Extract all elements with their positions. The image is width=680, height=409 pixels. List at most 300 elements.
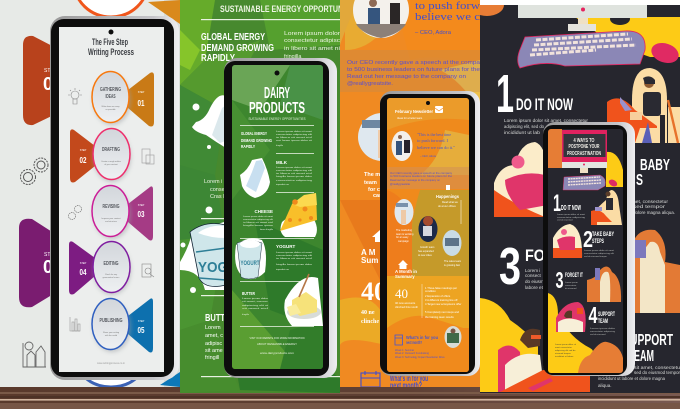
circle 1 gathering ideas: as possible [105,109,116,111]
step 1 label: 01 [138,98,145,108]
big yogurt cup: YOG [198,259,228,276]
left lorem: Cras l [210,194,224,200]
lorem yogurt: fringilla lorem ipsum dolor [276,263,312,266]
keyboard small [563,175,605,190]
lorem body top [284,31,340,60]
heading global: DEMAND GROWING [241,138,272,143]
month summary [395,269,417,279]
circle 3 revising: and structure [105,220,118,223]
big 40: 40 [361,277,387,306]
subtitle: SUSTAINABLE ENERGY OPPORTUNITIES [248,117,306,121]
circle 2 drafting [93,128,130,180]
speech paragraph: @reallygreatsite [390,182,411,186]
icon: calendar small [395,335,402,345]
heading global: GLOBAL ENERGY [241,131,267,136]
big yogurt cup [190,224,228,286]
forget text: consect [525,273,542,278]
what's in for you: next month? [390,381,422,390]
circle 1 gathering ideas: GATHERING [100,87,121,93]
number 2: 2 [583,226,593,252]
cheese splash [280,219,317,237]
heading take baby steps [636,157,670,189]
paragraph [347,60,480,87]
big number 1: 1 [496,64,514,124]
monitor [518,5,647,31]
dark notch [610,13,630,25]
speech paragraph [390,171,453,186]
left white text: can [373,193,383,199]
white captions: The sales team [444,260,461,263]
what's next [406,335,438,345]
text 1: Lorem ipsum dolor sit amet [557,213,585,216]
what's in for you: What's in for you [390,374,428,383]
heading global [241,132,272,148]
month summary: Summary [395,274,415,279]
big orange bow [148,0,180,24]
week list: Week 1: Seminar [395,349,414,352]
left white text: team [364,180,377,186]
icon: big chart [23,342,46,367]
40 caption: 40 new accounts [395,301,416,305]
do it now text: incididunt ut lab [504,130,540,135]
quote: – CEO, Adora [420,154,437,158]
text 1: consectetur adipiscing [557,216,586,219]
circle 1 gathering ideas: IDEAS [106,94,116,100]
lorem global: fringilla [276,144,284,147]
lorem yogurt: imperdiet nec [276,268,290,271]
keyboard [518,31,645,68]
footer text [250,336,305,355]
heading yogurt: YOGURT [276,244,296,249]
circle 5 publishing: Share your writing [103,331,119,334]
speech paragraph: Our CEO recently gave a speech at the company [390,171,453,175]
lorem butter: sit amet, consec [242,300,269,303]
icon: lightbulb [68,88,82,104]
butter [287,274,321,319]
white captions: team is working [396,233,414,236]
white captions: campaign [398,240,409,243]
text 2: Lorem ipsum dolor sit amet [584,249,614,252]
orange blob top left [470,0,504,16]
40 small: 40 [395,286,408,301]
white captions: is growing fast [444,264,460,267]
lorem yogurt [276,251,313,271]
title dairy products [250,87,305,113]
support text: incididunt ut labore et dolore magna [598,376,665,381]
forget text: do eiusm [525,279,544,284]
yellow blob text: Lorem ipsum dolor sit [555,343,576,346]
monitor title: 4 WAYS TO [574,138,595,144]
number 3 small: 3 [556,267,564,293]
paragraph: Our CEO recently gave a speech at the compa [347,60,480,66]
icon: big gears [20,158,48,184]
lorem milk: in libero sit amet nisl [276,172,313,175]
illustration: person at laptop [607,68,680,143]
circle 3 revising [92,186,129,236]
quote text: – CEO, Adora [415,30,451,36]
step 3 label: STEP [138,204,145,207]
heading take baby steps small: STEPS [592,238,604,245]
photo office [394,199,414,225]
month summary: A Month in [395,269,417,274]
text 1 [557,213,586,222]
yogurt cup [237,240,262,279]
phone 2 [224,58,337,378]
heading support team [630,332,673,365]
title dairy products: PRODUCTS [249,100,305,117]
left lorem: conse [210,187,225,193]
lorem bottom: fringill [205,355,219,361]
newsletter title: February Newsletter [395,109,433,114]
phone 1 [50,16,179,380]
circle 4 editing: EDITING [104,261,119,267]
do it now text: adipiscing elit, sed do [504,124,544,129]
step 1 label: STEP [138,91,145,94]
circle 2 drafting: DRAFTING [102,147,120,153]
big step label 04 [44,252,50,273]
lorem yogurt: in libero sit amet nisl [276,257,313,260]
lorem body top: in libero sit amet ni [284,46,340,52]
lorem milk: fringilla lorem ipsum dolor [276,175,312,178]
step 4 label: STEP [80,262,87,265]
heading butter small: BUTTER [242,291,256,296]
big blue bow [160,372,180,387]
website footer: www.writingprocess.co.in [97,362,126,365]
white captions: Growth team [420,246,434,249]
big bow step 02 [23,36,50,126]
icon: small bar chart [70,317,80,331]
lorem global: orci lorem ipsum dolor sit [276,139,313,142]
milk splash [240,158,270,198]
illustration 3 [587,266,621,302]
quote text [415,0,480,36]
circle 2 drafting: Create a rough outline [101,160,122,163]
phone 4 [543,122,635,376]
text 4: consectetur adipiscing [590,330,616,333]
text 3: consectetur [565,284,577,287]
white captions: has expanded [418,250,434,253]
step 2 label: STEP [80,149,87,152]
text 4: Lorem ipsum dolor [590,327,615,330]
circle 1 gathering ideas [92,72,129,122]
step 2 bow [70,129,95,182]
left white text: for c [368,187,380,193]
dividers [240,125,314,327]
lorem global: in libero sit amet nisl [276,136,313,139]
support text: aliqua. [598,383,612,388]
timeline [460,200,462,224]
big yogurt splash [180,222,224,290]
a month summary [361,248,378,265]
background polygons [180,0,340,393]
support text [598,365,680,388]
icon: house [372,230,385,242]
yogurt splash [235,238,266,279]
icon: house small [398,260,408,269]
phone 3 [380,91,480,376]
lorem bottom: adipisc [205,341,222,347]
big bow step 04 [19,218,50,308]
photo meeting [392,131,412,161]
left lorem [204,179,224,198]
yellow blob top right [575,17,680,57]
yellow blob text [555,343,576,358]
lorem yogurt: Lorem ipsum dolor sit amet [276,251,313,254]
big orange circle behind phone [78,0,144,16]
text 2: consectetur adipiscing elit [584,252,614,255]
circle 4 editing: grammatical errors [103,276,119,279]
forget text [525,268,544,290]
title dairy products: DAIRY [264,85,290,102]
yellow swoops [340,0,480,345]
circle 2 drafting: of your content [104,163,118,166]
illustration: yellow blob and woman [480,298,590,392]
big milk bottle [212,106,224,143]
quote [417,132,455,158]
milk bottle [246,160,265,192]
list [422,284,461,319]
lorem milk: imperdiet nec [276,183,290,186]
footer text: ABOUT RENEWABLE ENERGY [257,342,297,346]
step 5 bow [128,298,153,352]
lorem global: consectetur adipiscing elit [276,133,313,136]
darker band [340,50,480,92]
big step label 04: 0 [43,257,53,277]
40 caption [395,301,419,309]
photo group [444,326,462,348]
icon: magnifier on page [142,264,154,277]
list: 5 Completely next steps and [425,310,459,314]
big step label 02 [44,68,50,90]
a month summary: A M [361,248,376,257]
40 subtitle: clinche [361,319,379,325]
lorem butter: Lorem ipsum dolor [242,297,268,300]
paragraph: @reallygreatsite. [347,81,393,87]
step 5 label [138,320,145,335]
step 4 label: 04 [80,267,87,277]
step 5 label: 05 [138,325,145,335]
wooden table [0,387,680,409]
step 2 label: 02 [80,155,87,165]
step 1 label [138,91,145,108]
heading take baby steps small: TAKE BABY [592,231,614,238]
lorem bottom: Lorem [205,325,221,331]
panel: dairy products [180,0,345,393]
baby steps text: het, consectetur [633,199,669,204]
heading global energy: DEMAND GROWING [201,43,274,54]
text 4 [590,327,616,336]
lorem cheese: lorem fringilla [260,228,274,231]
yellow blob text: adipiscing elit sed do [555,349,576,352]
quote: to push forward. I [417,138,448,143]
what's next: What's in for you [406,335,438,340]
circle 3 revising: Improve your content [102,217,121,220]
step 4 bow [69,241,95,294]
paragraph: to 500 business leaders on future plans for the [347,67,480,73]
heading take baby steps: S [636,172,643,189]
number 1: 1 [553,190,561,217]
lorem cheese [243,215,274,231]
monitor title: PROCRASTINATION [567,151,601,157]
quote: believe we can do it." [417,145,455,150]
quote text: believe we c [415,11,480,23]
heading butter: BUTT [205,313,225,324]
lorem cheese: fringilla lorem ipsum [243,224,273,227]
heading forget it: FORGET IT [565,272,583,279]
circle 3 revising: REVISING [102,204,120,210]
big number 3: 3 [499,238,521,296]
text 3: do eiusmod [565,288,577,290]
what's in for you [390,374,428,390]
forget text: Lorem i [525,268,540,273]
yellow blob text: incididunt ut labore [555,355,574,358]
splash drops [180,104,212,293]
heading take baby steps small [592,231,614,245]
panel: newsletter [340,0,480,390]
list: the training team results [425,315,454,319]
happenings text: do at our offices [438,205,456,208]
baby steps text [633,199,675,215]
text 3 [565,281,578,290]
monitor title [562,130,607,162]
baby steps text: dolore magna aliqua. [633,210,675,215]
icon: gears small [68,206,82,220]
footer text: VISIT OUR WEBSITE FOR MORE INFORMATION [250,336,305,340]
monitor title: POSTPONE YOUR [568,144,600,150]
lorem global [276,130,313,147]
circle 4 editing [93,242,130,292]
speech paragraph: Read out her message to the company on [390,178,441,182]
yogurt cup: YOGURT [240,260,260,267]
heading support team: EAM [634,348,654,365]
left lorem: Lorem i [204,179,222,185]
circle 5 publishing: with the world [105,334,117,337]
step 5 label: STEP [138,320,145,323]
text 2: sed do eiusmod tempor [584,255,607,258]
circle 5 publishing: PUBLISHING [100,318,123,324]
white captions: for an easy [396,236,409,239]
heading global energy: GLOBAL ENERGY [201,32,265,43]
heading global energy: RAPIDLY [201,53,235,64]
lorem milk: consectetur adipiscing elit [276,169,313,172]
number 4 small: 4 [588,302,598,328]
lorem milk [276,166,313,186]
a month summary: Sum [361,256,378,265]
panel: writing process [0,0,180,387]
heading global: RAPIDLY [241,144,255,149]
header text: SUSTAINABLE ENERGY OPPORTUNI [220,4,345,14]
heading cheese: CHEESE [254,209,273,214]
big blue circle behind phone [86,380,136,387]
screen 4 [548,129,623,373]
circle 1 gathering ideas: Write down as many [101,105,120,108]
lorem cheese: consectetur adipiscing elit [243,218,273,221]
screen 3 [387,98,469,372]
butter splash [284,277,323,326]
lorem butter: fringilla [242,313,250,316]
happenings text [438,201,458,208]
heading milk: MILK [276,160,288,165]
icon: puzzle document [142,149,154,164]
left white text: The m [364,172,380,178]
baby steps text: sed tempor [633,204,666,209]
heading do it now: DO IT NOW [516,95,574,114]
pink blob small [608,178,618,188]
lorem cheese: Lorem ipsum dolor sit amet [243,215,273,218]
lorem milk: consectetur adipiscing [276,179,313,182]
paragraph: Read out her message to the company on [347,74,466,80]
white captions [396,229,461,267]
yellow blob text: eiusmod tempor [555,352,571,355]
text 2 [584,249,614,258]
list: condition [425,289,436,293]
yellow blob text: amet consectetur [555,346,572,349]
40 subtitle: 40 ne [361,310,375,316]
list: 2 Expansion of offers [425,294,451,298]
text 3: Lorem ipsum [565,281,578,284]
do it now text: Lorem ipsum dolor sit amet, consectetur [504,118,588,123]
lorem cheese: in libero sit amet nisl [243,221,274,224]
list: 3 A different training line off [425,298,458,302]
heading do it now small: DO IT NOW [561,205,581,212]
lorem bottom [205,325,223,361]
big step label 02: 0 [43,74,53,94]
heading support team small: SUPPORT [598,312,615,318]
title [88,37,134,58]
big step label 02: STEP [44,68,58,74]
title: The Five Step [92,37,128,48]
quote: "This is the best time [417,132,451,137]
what's next: next month? [406,340,422,345]
left white text [364,172,383,199]
week list [395,349,445,359]
lorem body top: Lorem ipsum dolor [284,31,340,37]
lorem milk: Lorem ipsum dolor sit amet [276,166,313,169]
lorem yogurt: consectetur adipiscing elit [276,254,313,257]
subtitle: Ideas for a better team [397,117,422,120]
lorem body top: consectetur adipisc [284,38,340,44]
top photo [353,0,409,38]
text 1: sed do eiusmod [557,220,573,222]
circle 5 publishing [92,298,129,350]
white captions: to new cities [418,254,433,257]
screen 1 [59,27,164,372]
heading global energy [201,33,274,61]
happenings: Happenings [436,194,459,199]
photo people [418,216,438,242]
week list: Week 2: Outreach Fundraising [395,352,429,355]
heading forget: FO [525,246,545,265]
illustration 2 [553,224,582,258]
screen 2 [232,65,323,369]
blobs on screen [548,129,623,373]
40 subtitle [361,310,379,325]
title: Writing Process [88,47,134,58]
illustration 1 [591,190,622,225]
big step label 04: STEP [44,252,58,258]
step 4 label [80,262,87,277]
forget text: labore et [525,285,544,290]
lorem butter: adipiscing elit ut [242,304,269,307]
circle shadows [93,75,131,352]
circle 4 editing: Check for any [105,274,117,276]
do it now text [504,118,588,135]
step 2 label [80,149,87,165]
step 3 label [138,204,145,219]
lorem global: Lorem ipsum dolor sit amet [276,130,313,133]
pink blob [649,40,680,66]
text 4: sed do eiusmod [590,334,606,336]
